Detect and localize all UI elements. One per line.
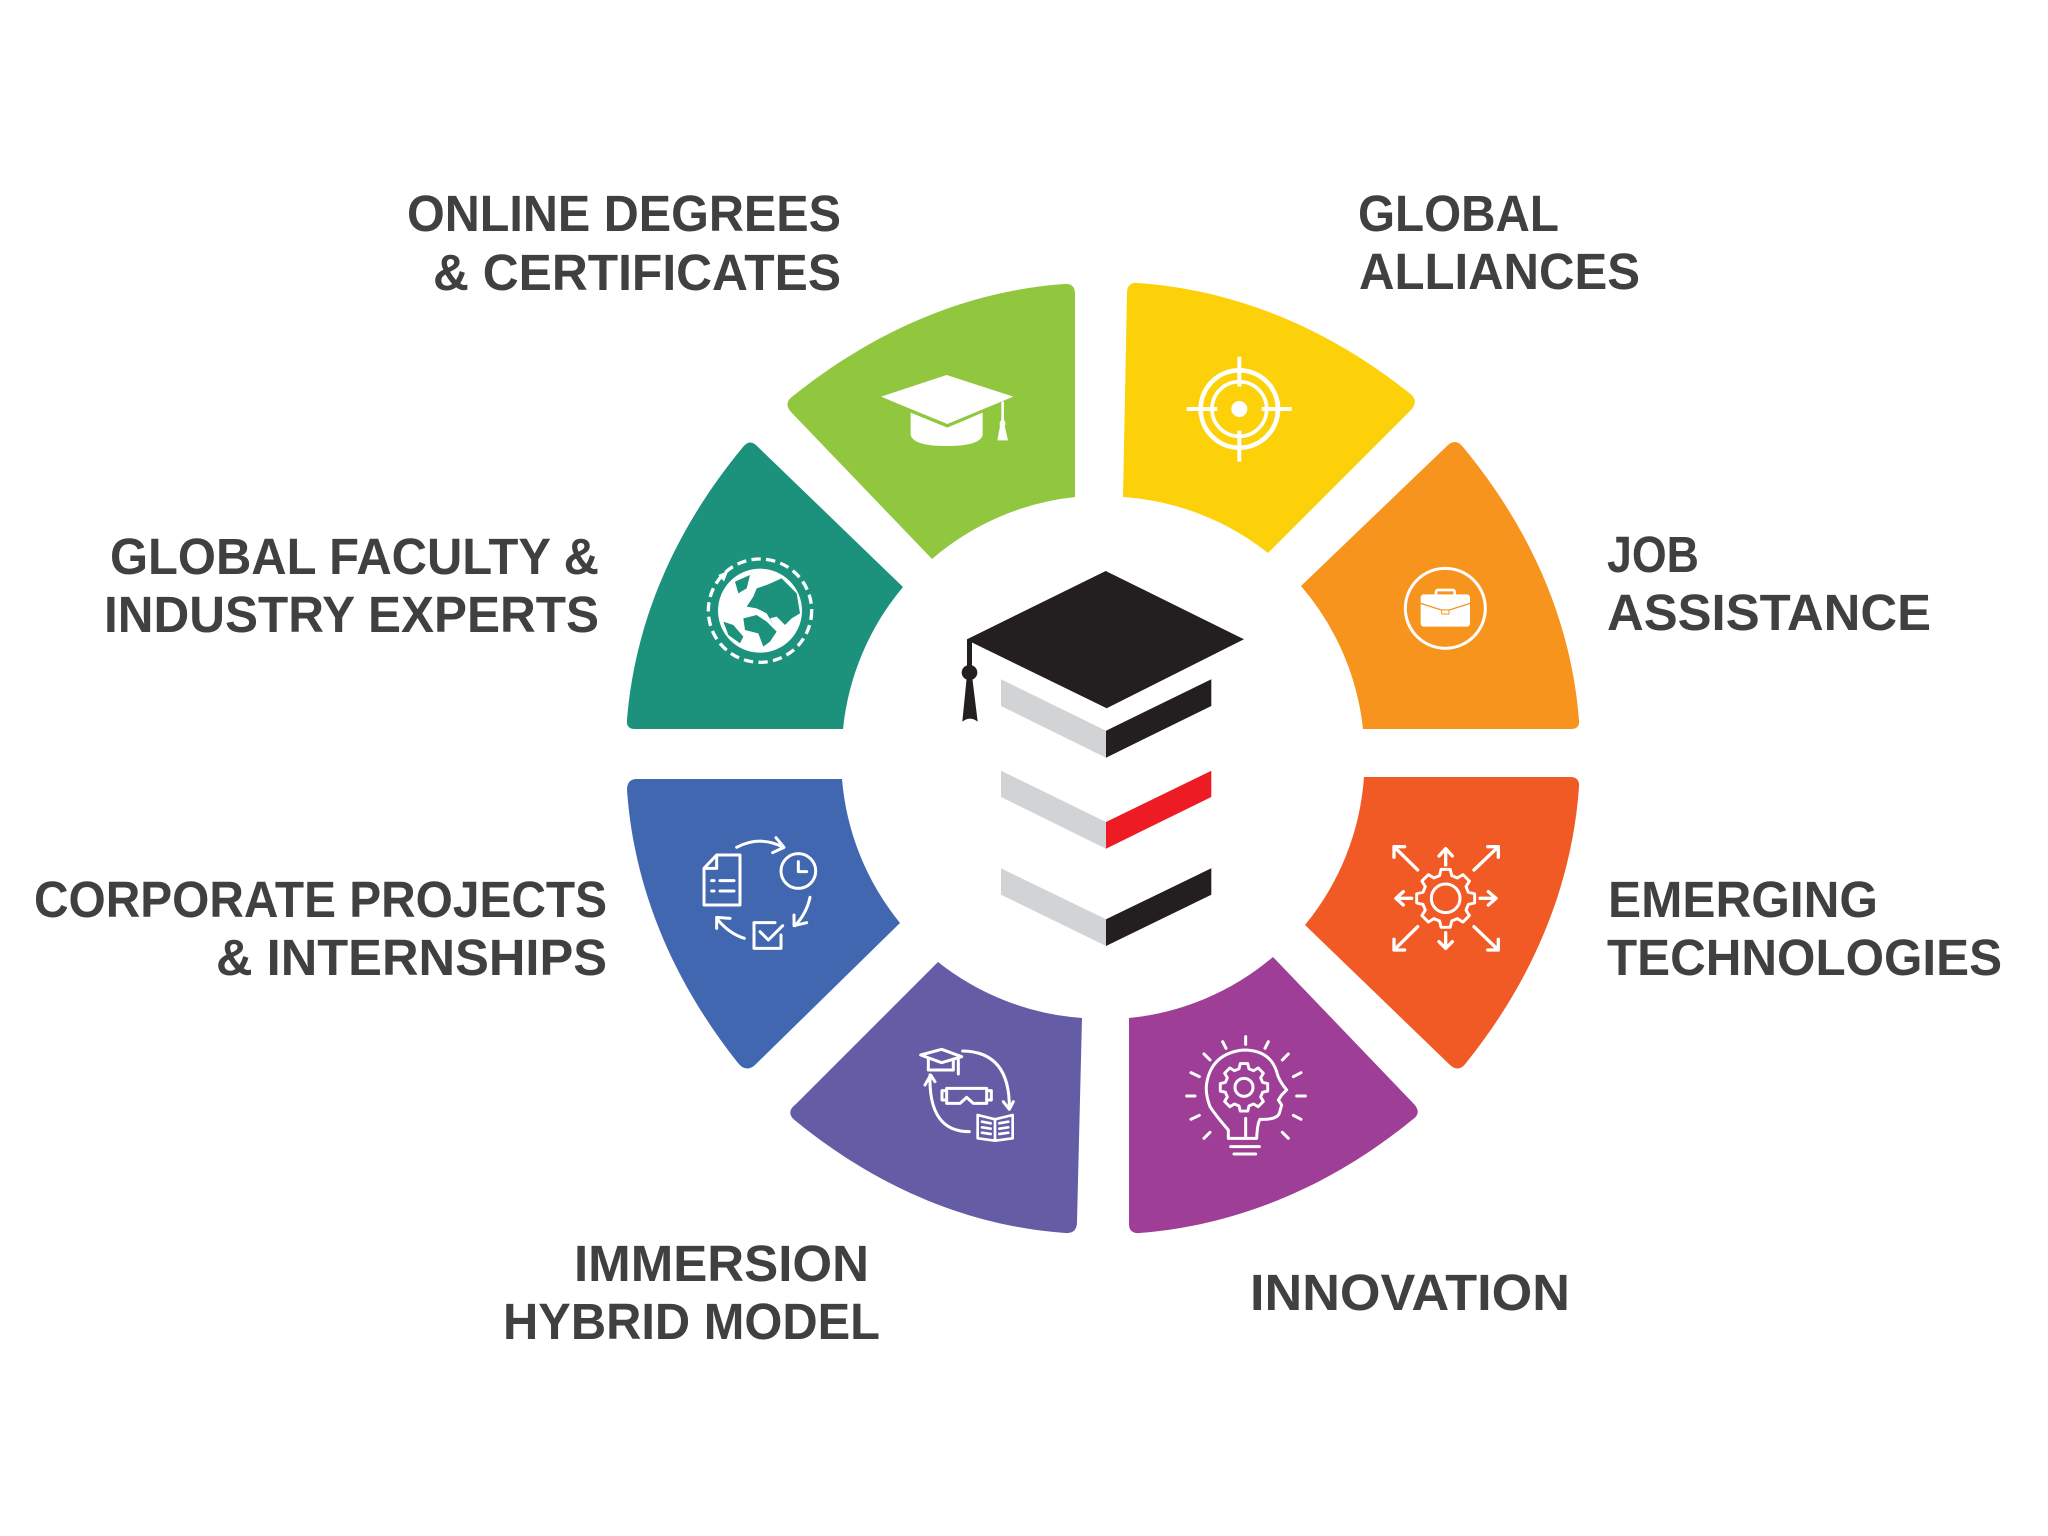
yellow wheel segment <box>1123 283 1415 553</box>
label: global faculty and industry experts <box>104 528 599 643</box>
label: innovation: INNOVATION <box>1250 1264 1570 1321</box>
red-orange wheel segment <box>1305 777 1579 1069</box>
label: online degrees and certificates <box>407 185 841 301</box>
label: emerging technologies <box>1607 871 2002 986</box>
panel: immersion hybrid model segment <box>790 962 1082 1233</box>
icon: graduation cap <box>881 375 1013 446</box>
tassel <box>962 665 978 722</box>
label: immersion hybrid model <box>503 1235 880 1350</box>
icon: workflow cycle <box>704 838 816 948</box>
label: immersion hybrid model: HYBRID MODEL <box>503 1293 880 1350</box>
label: global alliances: ALLIANCES <box>1359 243 1640 300</box>
label: emerging technologies: EMERGING <box>1608 871 1878 928</box>
center logo: mortarboard on stacked books <box>962 571 1244 946</box>
icon: gear with arrows <box>1394 847 1498 950</box>
icon: cycle with cap goggles and book <box>921 1049 1013 1141</box>
purple wheel segment <box>790 962 1082 1233</box>
icon: target <box>1187 357 1292 462</box>
label: corporate projects and internships <box>34 871 607 986</box>
panel: job assistance segment <box>1301 442 1579 729</box>
label: emerging technologies: TECHNOLOGIES <box>1607 929 2002 986</box>
label: online degrees and certificates: & CERTIFICATES <box>433 244 841 301</box>
magenta wheel segment <box>1129 957 1418 1233</box>
mortarboard top <box>967 571 1244 708</box>
orange wheel segment <box>1301 442 1579 729</box>
label: job assistance: JOB <box>1607 526 1699 583</box>
panel: global faculty segment <box>627 442 903 729</box>
label: global alliances <box>1358 185 1640 300</box>
middle book <box>1001 771 1211 849</box>
top book <box>1001 679 1211 758</box>
icon: globe <box>708 559 812 662</box>
green wheel segment <box>787 284 1075 559</box>
teal wheel segment <box>627 442 903 729</box>
icon: head bulb with gear <box>1187 1037 1305 1154</box>
panel: online degrees segment <box>787 284 1075 559</box>
icon: briefcase <box>1405 568 1485 648</box>
label: global faculty and industry experts: INDUSTRY EXPERTS <box>104 586 599 643</box>
panel: emerging technologies segment <box>1305 777 1579 1069</box>
bottom book <box>1001 868 1211 946</box>
label: online degrees and certificates: ONLINE DEGREES <box>407 185 841 242</box>
blue wheel segment <box>627 779 900 1069</box>
panel: global alliances segment <box>1123 283 1415 553</box>
label: corporate projects and internships: & INTERNSHIPS <box>216 929 607 986</box>
panel: innovation segment <box>1129 957 1418 1233</box>
label: global faculty and industry experts: GLOBAL FACULTY & <box>110 528 599 585</box>
label: job assistance: ASSISTANCE <box>1607 584 1931 641</box>
label: corporate projects and internships: CORPORATE PROJECTS <box>34 871 607 928</box>
panel: corporate projects segment <box>627 779 900 1069</box>
label: job assistance <box>1607 526 1931 641</box>
label: global alliances: GLOBAL <box>1358 185 1559 242</box>
label: immersion hybrid model: IMMERSION <box>574 1235 869 1292</box>
